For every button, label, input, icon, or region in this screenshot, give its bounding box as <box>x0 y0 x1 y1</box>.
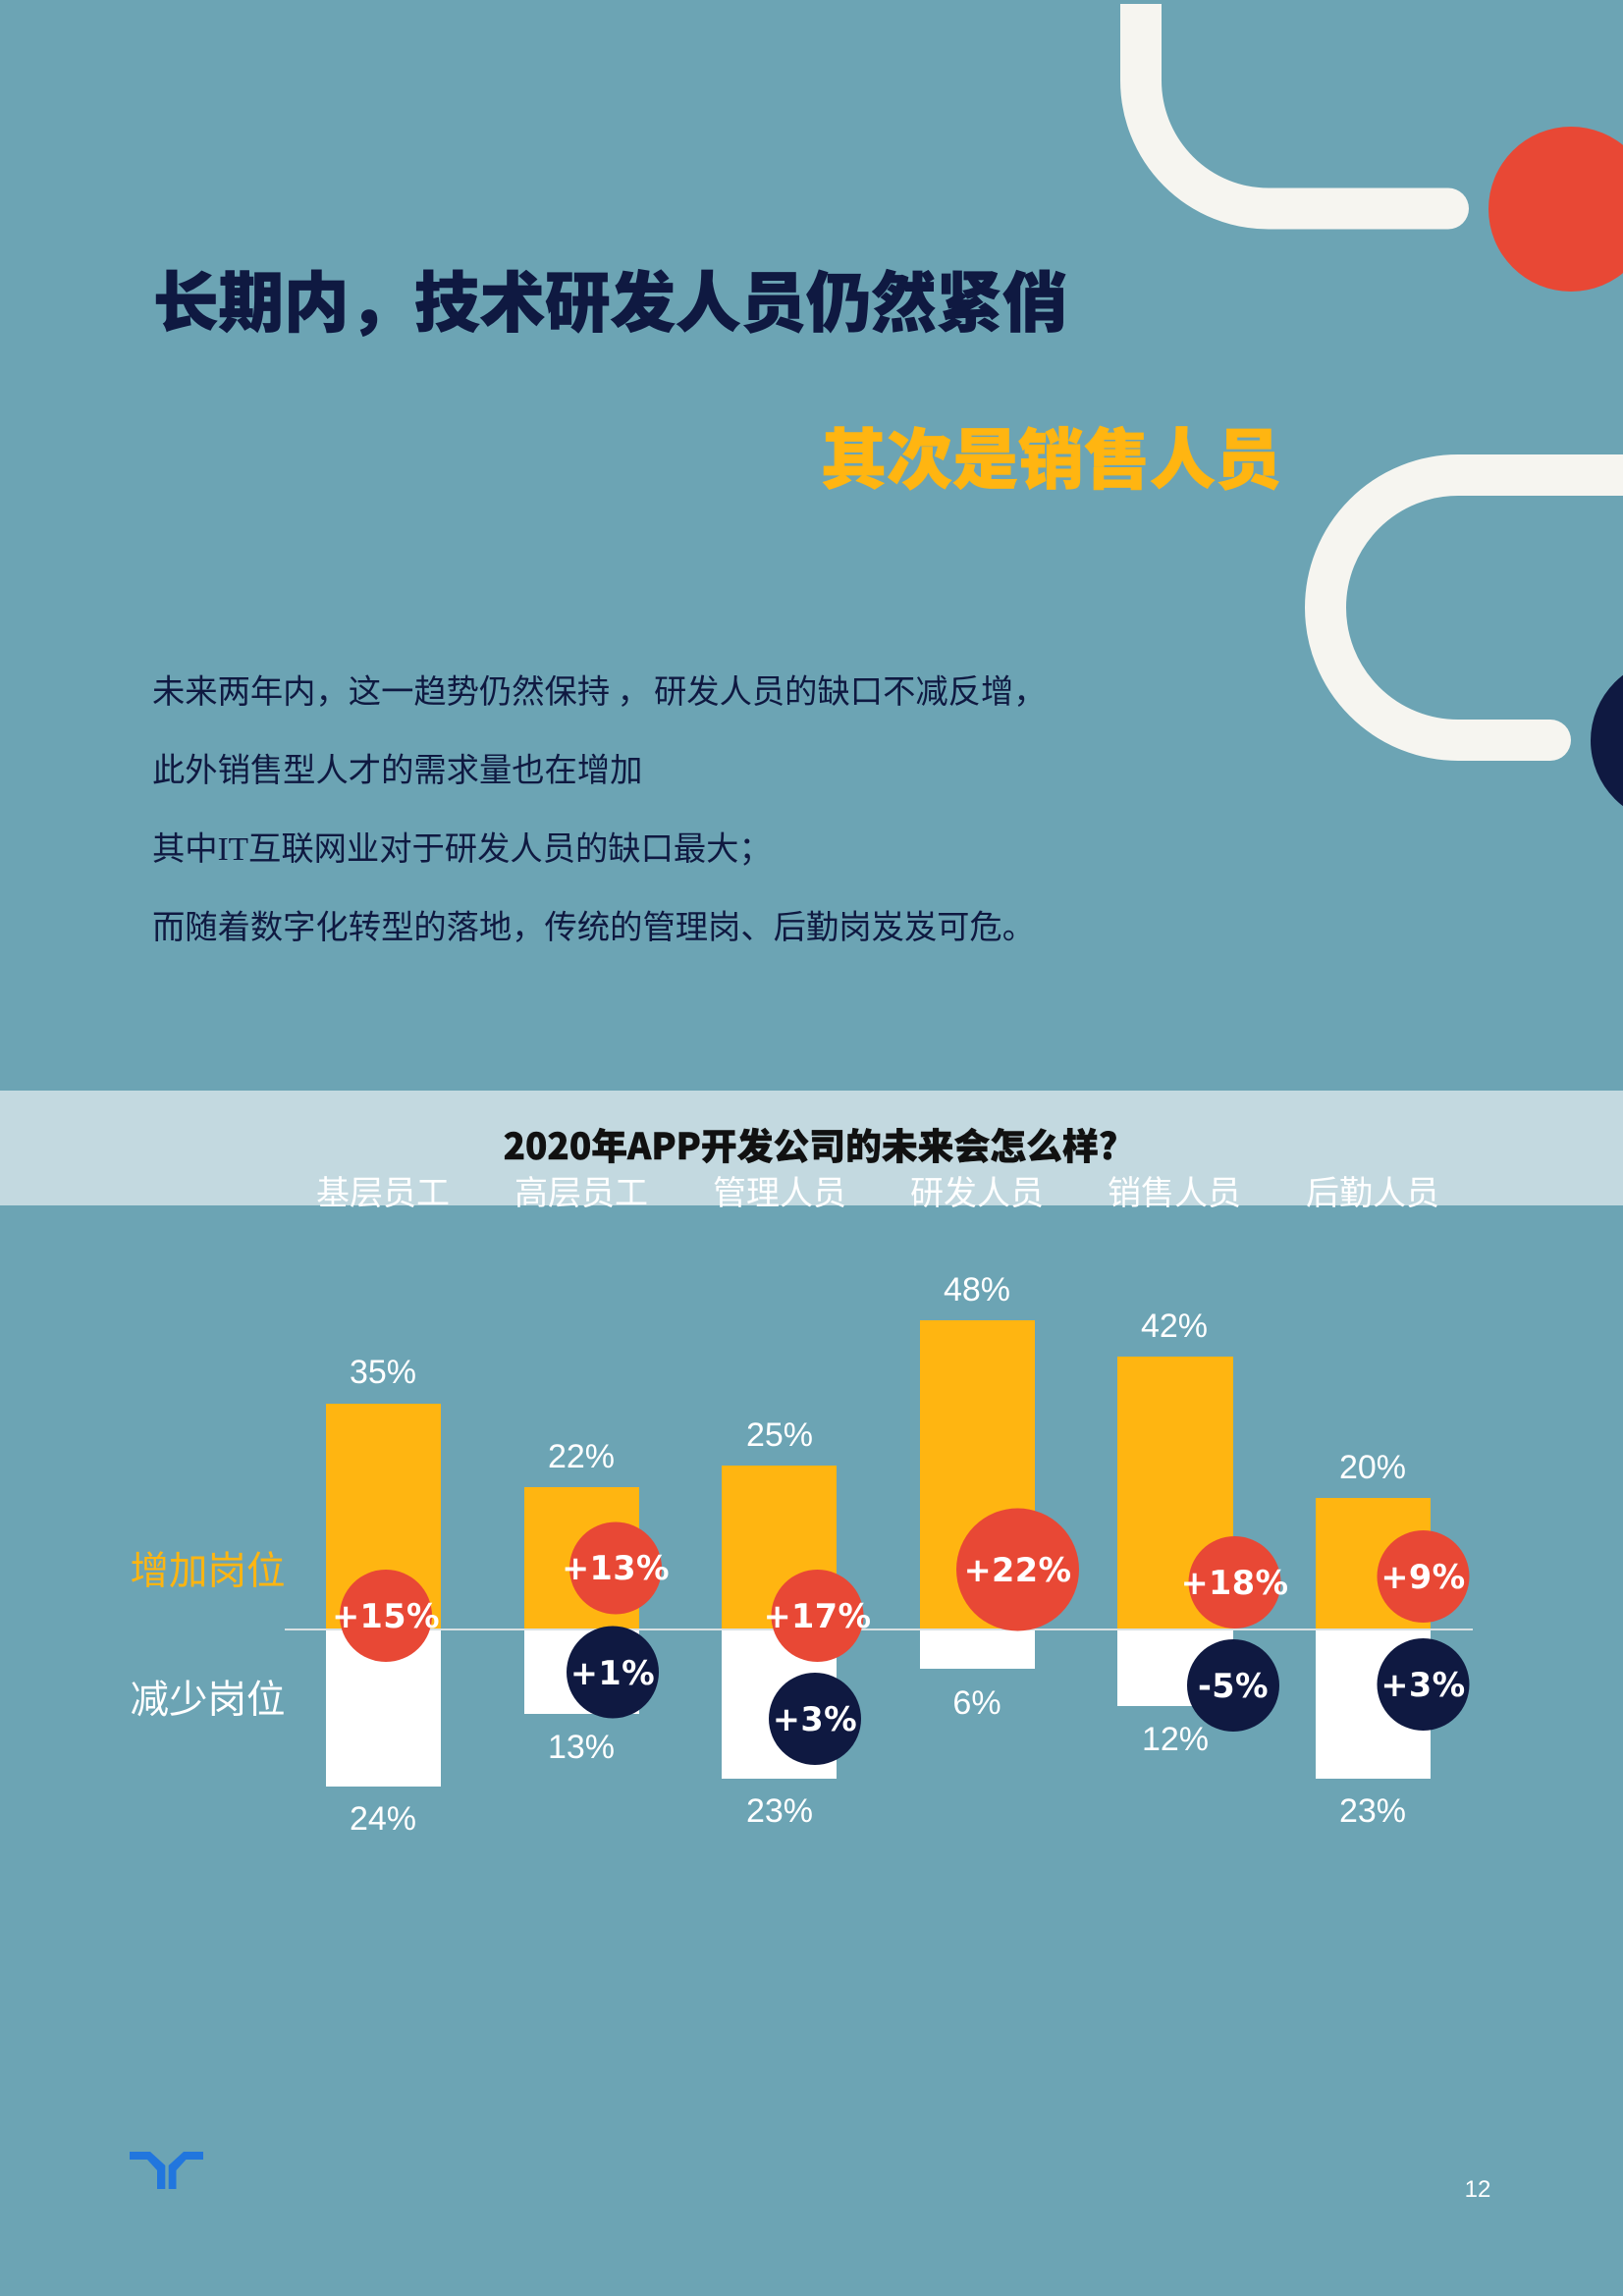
body text: 研发人员的缺口不减反增， <box>654 665 1047 713</box>
bars: 基层员工 <box>326 1404 441 1787</box>
bar chart <box>326 1320 1431 1787</box>
bar value labels: 25% <box>746 1416 813 1454</box>
bar value labels: 13% <box>548 1729 615 1766</box>
bar value labels: 42% <box>1141 1308 1208 1345</box>
body text <box>152 665 1047 948</box>
body text: 其中IT互联网业对于研发人员的缺口最大； <box>152 822 772 870</box>
column headers: 基层员工 <box>316 1166 450 1214</box>
chart title band <box>0 1091 1623 1205</box>
bubble: +13% <box>562 1522 670 1614</box>
icon: logo <box>130 2152 203 2189</box>
bubble: +22%: +22% <box>964 1551 1071 1589</box>
bar value labels: 12% <box>1142 1721 1209 1758</box>
bubble: +22% <box>956 1508 1079 1631</box>
title line 1: 长期内，技术研发人员仍然紧俏 <box>153 251 1067 346</box>
decoration: red circle <box>1488 127 1623 292</box>
bubble: -5% <box>1187 1639 1279 1732</box>
bar value labels: 6% <box>952 1684 1001 1722</box>
bars: 高层员工 <box>524 1487 639 1714</box>
title line 2: 其次是销售人员 <box>821 407 1281 503</box>
column headers: 管理人员 <box>713 1166 846 1214</box>
decoration: C-shaped curved line <box>1325 475 1623 761</box>
bubble: +1%: +1% <box>570 1654 655 1692</box>
bar value labels: 48% <box>944 1271 1010 1308</box>
column headers <box>316 1166 1439 1214</box>
row label: increase: 增加岗位 <box>130 1540 285 1596</box>
bar value labels: 23% <box>746 1792 813 1830</box>
bar value labels: 20% <box>1339 1449 1406 1486</box>
body text: 而随着数字化转型的落地，传统的管理岗、后勤岗岌岌可危。 <box>152 900 1035 948</box>
bubble: +17%: +17% <box>764 1597 871 1635</box>
bar value labels: 24% <box>350 1800 416 1838</box>
bubble: +3% logistics <box>1377 1638 1469 1731</box>
bubble: +15% <box>332 1570 440 1662</box>
bar value labels: 35% <box>350 1354 416 1391</box>
bubble: +9%: +9% <box>1380 1558 1466 1596</box>
change bubbles <box>332 1508 1469 1765</box>
bar value labels <box>350 1271 1406 1838</box>
bubble: +3% management: +3% <box>773 1700 857 1738</box>
decoration: top curved line <box>1141 4 1469 230</box>
bubble: +15%: +15% <box>332 1597 440 1635</box>
bars: 研发人员 <box>920 1320 1035 1669</box>
bubble: +3% management <box>769 1673 861 1765</box>
bubble: +13%: +13% <box>562 1549 670 1587</box>
bars: 后勤人员 <box>1316 1498 1431 1779</box>
row label: decrease: 减少岗位 <box>130 1669 285 1725</box>
column headers: 后勤人员 <box>1306 1166 1439 1214</box>
column headers: 销售人员 <box>1108 1166 1241 1214</box>
chart baseline <box>285 1629 1473 1630</box>
column headers: 研发人员 <box>910 1166 1044 1214</box>
bubble: +17% <box>764 1570 871 1662</box>
page number: 12 <box>1465 2176 1490 2203</box>
column headers: 高层员工 <box>514 1166 648 1214</box>
bubble: +3% logistics: +3% <box>1380 1666 1466 1704</box>
bar value labels: 23% <box>1339 1792 1406 1830</box>
bars: 管理人员 <box>722 1466 837 1779</box>
bubble: +1% <box>567 1626 659 1718</box>
body text: 未来两年内，这一趋势仍然保持 ， <box>152 665 650 713</box>
bubble: -5%: -5% <box>1198 1667 1269 1705</box>
bar value labels: 22% <box>548 1438 615 1475</box>
bubble: +9% <box>1377 1530 1469 1623</box>
bubble: +18%: +18% <box>1181 1564 1288 1602</box>
chart title: 2020年APP开发公司的未来会怎么样? <box>504 1117 1117 1170</box>
body text: 此外销售型人才的需求量也在增加 <box>152 743 642 791</box>
bars: 销售人员 <box>1117 1357 1233 1706</box>
bubble: +18% <box>1181 1536 1288 1629</box>
decoration: navy circle <box>1591 658 1623 823</box>
